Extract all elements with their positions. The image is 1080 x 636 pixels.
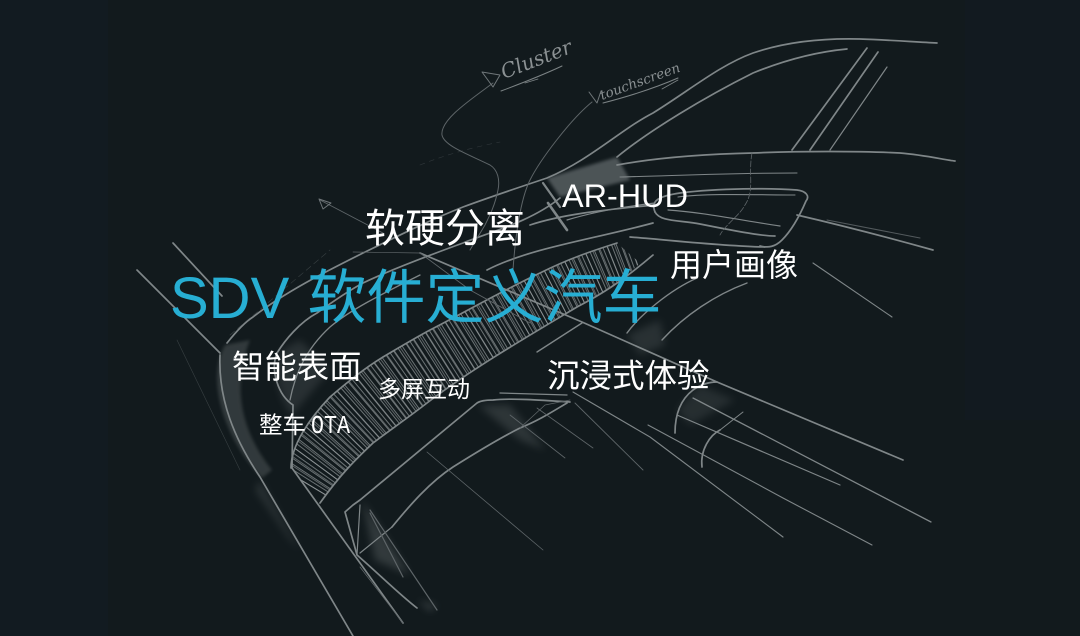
icon: arrow heads — [319, 72, 601, 209]
label: Cluster: Cluster — [497, 34, 576, 84]
label: 整车OTA — [259, 411, 350, 441]
main curves thick — [137, 39, 955, 636]
shading smudges — [217, 157, 735, 612]
label: 沉浸式体验: 沉浸式体验 — [547, 358, 710, 394]
label: 整车OTA: OTA — [311, 411, 350, 441]
dashboard sketch illustration — [137, 34, 955, 636]
label: 智能表面: 智能表面 — [232, 349, 362, 385]
label: 多屏互动: 多屏互动 — [378, 376, 470, 402]
title: 软件定义汽车 — [308, 265, 662, 331]
title: SDV — [170, 266, 289, 331]
label: 软硬分离: 软硬分离 — [365, 207, 525, 251]
label: 整车OTA: 整车 — [259, 412, 306, 438]
label: AR-HUD: AR-HUD — [562, 178, 688, 214]
label: 用户画像: 用户画像 — [670, 247, 798, 283]
label: touchscreen: touchscreen — [598, 60, 682, 104]
thin construction lines — [177, 83, 752, 623]
handwritten labels — [497, 34, 682, 104]
hatched centre band — [300, 248, 640, 480]
